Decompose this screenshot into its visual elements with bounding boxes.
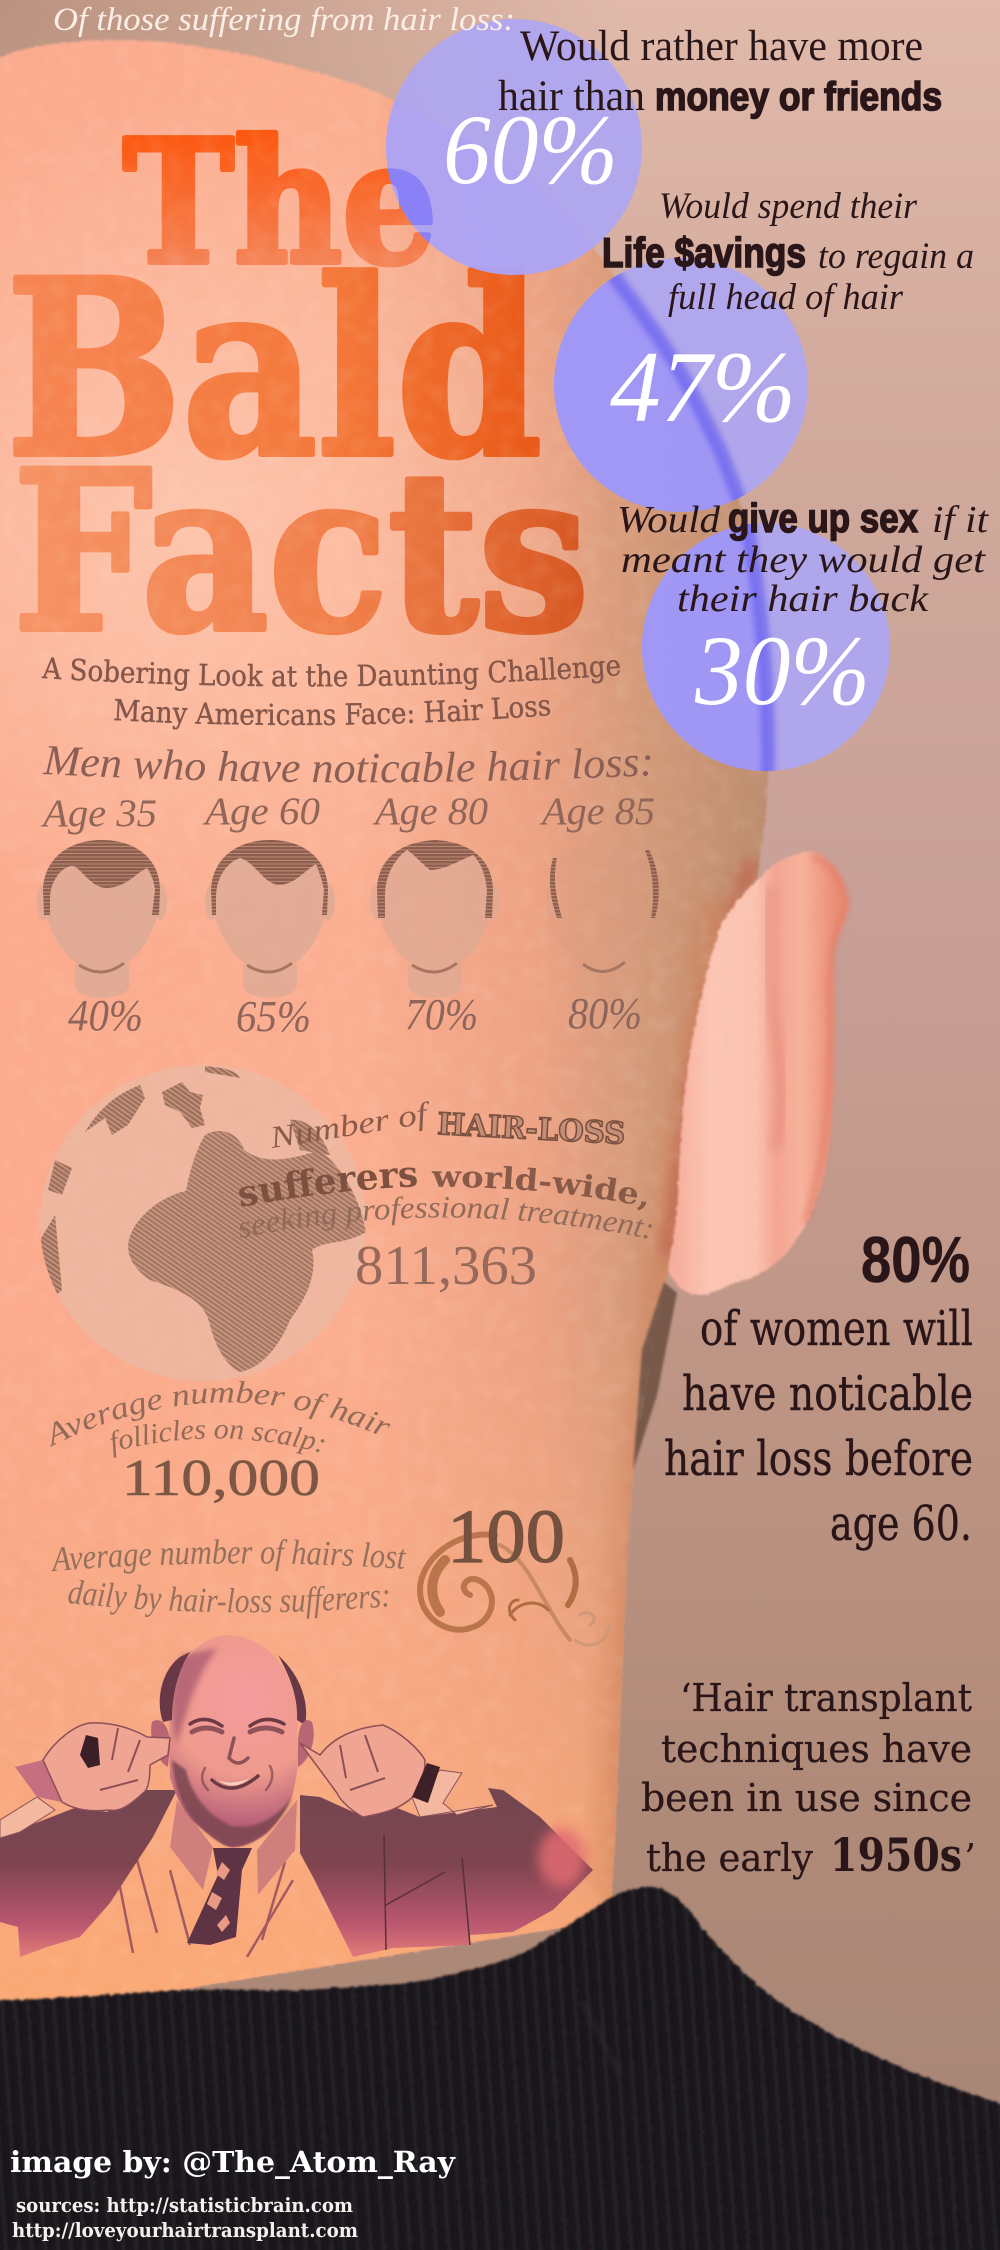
stat text: give up sex: Would (617, 499, 721, 541)
text: hairs lost daily (51, 1539, 406, 1619)
icon: head age 60 (205, 840, 335, 998)
title: The Bald Facts: Facts (13, 422, 589, 681)
stat text: life savings: full head of hair (668, 277, 904, 318)
age labels: Age 80 (372, 790, 488, 833)
tie (187, 1848, 252, 1945)
quote: hair transplant: been in use since (641, 1776, 972, 1820)
stat text: life savings: to regain a (818, 236, 974, 277)
icon: flourish (420, 1534, 610, 1645)
percentages by age: 70% (405, 990, 478, 1039)
stat number: 30%: 30% (694, 615, 870, 726)
illustration: man plugging ears (0, 1635, 593, 1957)
stat text: life savings: Would spend their (659, 186, 918, 227)
ears (151, 1720, 314, 1767)
title: The Bald Facts (6, 103, 589, 681)
percentages by age (68, 989, 642, 1041)
left fist (43, 1723, 170, 1811)
stat text: money or friends: hair than (498, 73, 645, 120)
stat text: money or friends (498, 23, 942, 120)
subtitle: A Sobering Look at the Daunting Challenge (42, 657, 620, 691)
stat text: life savings (602, 186, 974, 318)
intro line: Of those suffering from hair loss: (53, 2, 515, 38)
quote: hair transplant: techniques have (661, 1727, 972, 1771)
right shirt cuff (412, 1770, 493, 1817)
text: hairs lost daily: Average number of hairs lost (51, 1539, 406, 1574)
title: The Bald Facts: Bald (6, 228, 542, 512)
shirt shading lines (120, 1860, 293, 1957)
jaw shadow (172, 1760, 293, 1847)
wrist watch (412, 1763, 440, 1803)
stat: 80% of women (664, 1223, 973, 1552)
percentages by age: 40% (68, 991, 143, 1040)
text: number of hair-loss sufferers (239, 1095, 652, 1238)
text: average follicles: Average number of hair (50, 1381, 390, 1447)
title: The Bald Facts: The (123, 103, 437, 303)
text: number of hair-loss sufferers: seeking professional treatment: (240, 1196, 652, 1238)
ear (668, 852, 848, 1295)
number: 811,363: 811,363 (355, 1235, 537, 1297)
globe illustration (40, 1065, 366, 1381)
left cuff (0, 1797, 55, 1838)
sources: http://loveyourhairtransplant.com (12, 2218, 358, 2242)
text: number of hair-loss sufferers: Number of (266, 1095, 434, 1155)
number: 110,000: 110,000 (122, 1450, 320, 1507)
stat text: give up sex: meant they would get (621, 539, 987, 581)
collar (170, 1800, 297, 1895)
stat text: give up sex: give up sex (728, 495, 918, 541)
text: average follicles: follicles on scalp: (110, 1420, 324, 1458)
sources: sources: http://statisticbrain.com (16, 2193, 353, 2217)
circle: 47% (554, 258, 808, 512)
shadow under ear (633, 1282, 677, 1470)
jacket seams (384, 1835, 470, 1950)
icon: head age 85 (546, 842, 660, 998)
side hair (160, 1652, 306, 1725)
age labels: Age 60 (202, 790, 320, 833)
credit: image by: @The_Atom_Ray (10, 2145, 456, 2179)
age labels: Age 85 (539, 790, 655, 833)
stat text: life savings: Life $avings (602, 229, 806, 276)
skin texture over title (4, 130, 739, 1982)
stat text: money or friends: money or friends (655, 75, 942, 119)
scalp shading (171, 1648, 218, 1745)
age labels (40, 790, 655, 835)
stat text: give up sex: their hair back (677, 578, 929, 620)
subtitle: Many Americans Face: Hair Loss (114, 697, 550, 730)
sources (12, 2193, 358, 2242)
text: hairs lost daily: daily by hair-loss sufferers: (68, 1580, 388, 1619)
stat text: money or friends: Would rather have more (520, 23, 923, 70)
face (169, 1635, 298, 1847)
subtitle (42, 657, 620, 730)
quote: hair transplant: 1950s (830, 1828, 962, 1882)
circle: 60% (386, 19, 642, 275)
icon: head age 80 (370, 840, 500, 998)
circle tint over head (386, 102, 778, 771)
number: 100: 100 (447, 1495, 565, 1579)
jacket left (0, 1790, 177, 1957)
stat number: 47%: 47% (610, 331, 796, 444)
text: number of hair-loss sufferers: world-wide, (432, 1166, 646, 1210)
quote: hair transplant: the early (646, 1836, 814, 1880)
text: number of hair-loss sufferers: sufferers (239, 1168, 417, 1206)
heading: men with hair loss: Men who have noticable hair loss: (42, 746, 650, 783)
quote: hair transplant: ‘Hair transplant (680, 1676, 972, 1720)
face features (190, 1719, 284, 1790)
stat text: give up sex (617, 495, 990, 620)
icon: head age 35 (37, 840, 167, 998)
percentages by age: 80% (568, 989, 642, 1038)
right fist (300, 1725, 425, 1817)
sweater (0, 1887, 1000, 2250)
quote: hair transplant (641, 1676, 976, 1882)
stat number: 60%: 60% (443, 94, 618, 205)
quote: hair transplant: ’ (964, 1836, 976, 1880)
bald head (0, 0, 800, 2020)
text: number of hair-loss sufferers: HAIR-LOSS (437, 1107, 626, 1152)
stat: 80% of women: 80% (861, 1223, 970, 1296)
title letter seen through circle: The (123, 103, 437, 303)
circle: 30% (642, 523, 890, 771)
percentages by age: 65% (236, 992, 311, 1041)
age labels: Age 35 (40, 792, 157, 835)
stat text: give up sex: if it (932, 499, 990, 541)
sleeve highlight (538, 1828, 586, 1888)
jacket right (300, 1788, 593, 1957)
